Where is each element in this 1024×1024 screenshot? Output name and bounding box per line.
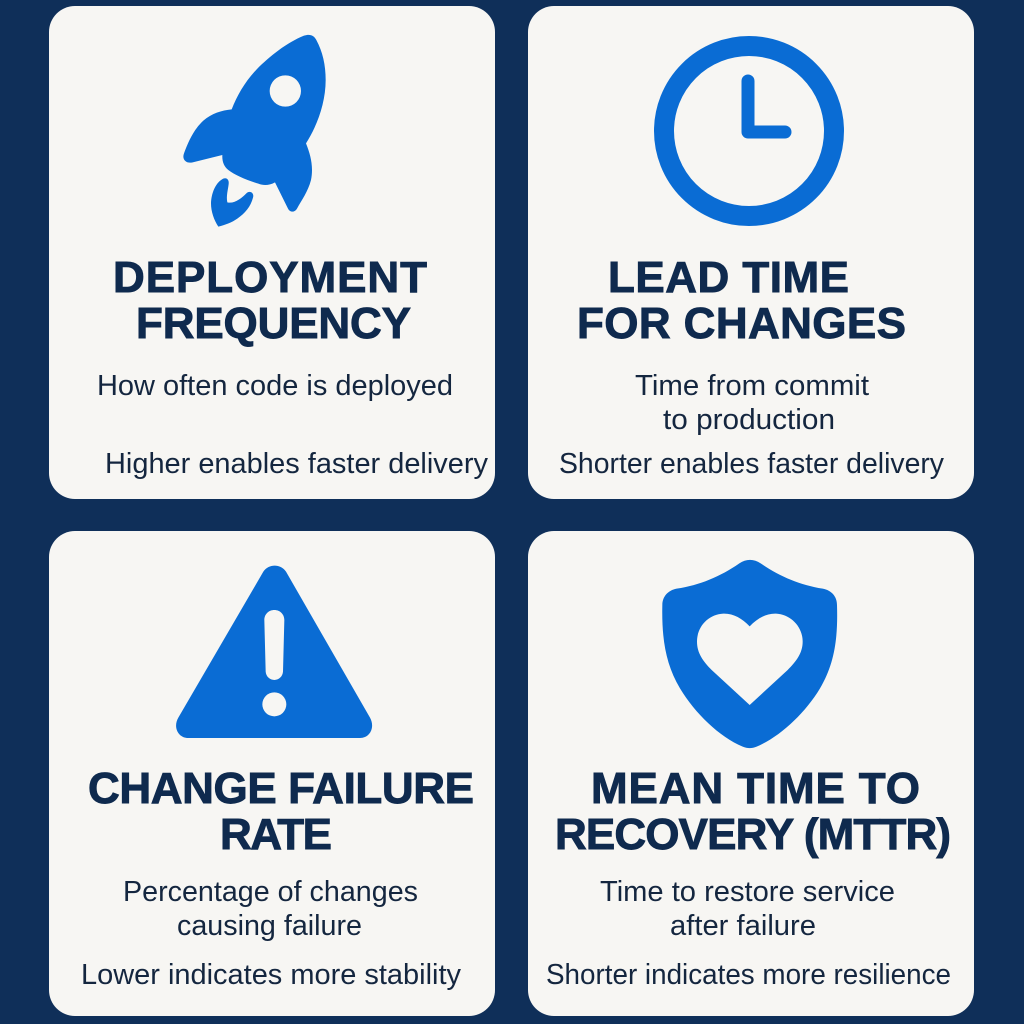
heading: lead time for changes: FOR CHANGES [577, 299, 906, 348]
heading: change failure rate: RATE [220, 810, 332, 859]
panel: lead time for changes [528, 6, 974, 499]
icon: clock [664, 46, 834, 216]
text: definition [600, 876, 895, 942]
text: definition: Percentage of changes [123, 876, 418, 908]
heading: lead time for changes [577, 253, 906, 348]
text: impact: Shorter enables faster delivery [559, 448, 944, 480]
text: definition: Time from commit [635, 370, 869, 402]
text: impact: Lower indicates more stability [81, 959, 461, 991]
heading: change failure rate [88, 764, 474, 859]
icon: rocket [183, 35, 326, 227]
text: definition [123, 876, 418, 942]
heading: deployment frequency: DEPLOYMENT [113, 253, 427, 302]
heading: mean time to recovery [555, 764, 951, 859]
heading: lead time for changes: LEAD TIME [608, 253, 849, 302]
panel: change failure rate [49, 531, 495, 1016]
text: impact: Higher enables faster delivery [105, 448, 488, 480]
text: impact: Shorter indicates more resilience [546, 959, 951, 991]
text: definition: Time to restore service [600, 876, 895, 908]
text: definition: causing failure [177, 910, 362, 942]
icon: warning triangle [176, 566, 372, 738]
text: definition: to production [663, 404, 835, 436]
text: definition: How often code is deployed [97, 370, 453, 402]
heading: mean time to recovery: MEAN TIME TO [591, 764, 920, 813]
panel: deployment frequency [49, 6, 495, 499]
text: definition: after failure [670, 910, 816, 942]
heading: deployment frequency: FREQUENCY [136, 299, 411, 348]
heading: change failure rate: CHANGE FAILURE [88, 764, 474, 813]
text: definition [635, 370, 869, 436]
heading: mean time to recovery: RECOVERY (MTTR) [555, 810, 951, 859]
heading: deployment frequency [113, 253, 427, 348]
panel: mean time to recovery [528, 531, 974, 1016]
icon: shield with heart [662, 560, 837, 748]
